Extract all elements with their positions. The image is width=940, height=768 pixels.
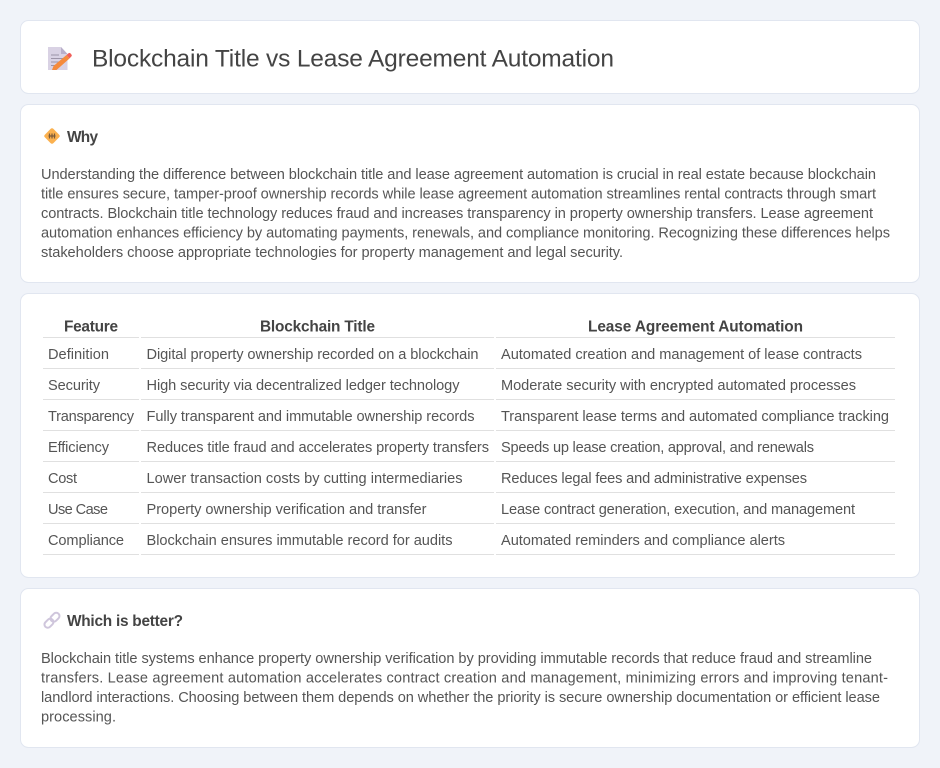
row: security: Security xyxy=(48,378,101,394)
icon: document with pencil xyxy=(48,47,72,70)
panel: which is better xyxy=(20,588,920,748)
row: transparency xyxy=(48,409,889,425)
text block: which is better paragraph: Blockchain title systems enhance property ownership verification by providing immutable records that reduce fraud and streamline xyxy=(41,651,872,667)
panel: header xyxy=(20,20,920,94)
panel: why xyxy=(20,104,920,282)
row: compliance: Compliance xyxy=(48,533,124,549)
row: compliance: Blockchain ensures immutable record for audits xyxy=(146,533,452,549)
row: security: High security via decentralized ledger technology xyxy=(146,378,460,394)
row: use case: Property ownership verification and transfer xyxy=(146,502,427,518)
row: use case xyxy=(48,502,855,518)
row: security: Moderate security with encrypted automated processes xyxy=(501,378,856,394)
row: definition: Digital property ownership recorded on a blockchain xyxy=(146,347,478,363)
text block: why paragraph: stakeholders choose appropriate technologies for property management and legal security. xyxy=(41,245,623,261)
row: cost: Cost xyxy=(48,471,77,487)
row: cost: Lower transaction costs by cutting intermediaries xyxy=(146,471,462,487)
panel: comparison table xyxy=(20,294,920,578)
row: efficiency: Speeds up lease creation, approval, and renewals xyxy=(501,440,814,456)
row: definition xyxy=(48,347,862,363)
row: cost xyxy=(48,471,807,487)
table header: Lease Agreement Automation xyxy=(588,318,803,336)
text block: why paragraph: Understanding the difference between blockchain title and lease agreement automation is crucial in real estate because blockchain xyxy=(41,167,876,183)
table header: Feature xyxy=(64,318,118,336)
row: efficiency: Efficiency xyxy=(48,440,110,456)
row: definition: Automated creation and management of lease contracts xyxy=(501,347,862,363)
heading: which is better: Which is better? xyxy=(67,613,183,630)
row: security xyxy=(48,378,856,394)
row: cost: Reduces legal fees and administrative expenses xyxy=(501,471,807,487)
text block: which is better paragraph: transfers. Lease agreement automation accelerates contract creation and management, minimizing errors and improving tenant- xyxy=(41,670,888,686)
text block: why paragraph: title ensures secure, tamper-proof ownership records while lease agreement automation streamlines rental contracts through smart xyxy=(41,186,876,202)
row: efficiency: Reduces title fraud and accelerates property transfers xyxy=(146,440,489,456)
title: Blockchain Title vs Lease Agreement Automation xyxy=(92,46,614,72)
table header: Blockchain Title xyxy=(260,318,375,336)
text block: why paragraph xyxy=(41,167,890,261)
text block: which is better paragraph xyxy=(41,651,888,726)
icon: diamond sign xyxy=(44,128,60,144)
row: transparency: Transparent lease terms and automated compliance tracking xyxy=(501,409,889,425)
row: use case: Use Case xyxy=(48,502,108,518)
row: compliance xyxy=(48,533,785,549)
text block: which is better paragraph: processing. xyxy=(41,710,116,726)
text block: why paragraph: automation enhances efficiency by automating payments, renewals, and compliance monitoring. Recognizing these differences helps xyxy=(41,226,890,242)
row: definition: Definition xyxy=(48,347,109,363)
row: transparency: Transparency xyxy=(48,409,135,425)
row: compliance: Automated reminders and compliance alerts xyxy=(501,533,785,549)
icon: chain link xyxy=(43,611,61,629)
text block: which is better paragraph: landlord interactions. Choosing between them depends on whether the priority is secure ownership documentation or efficient lease xyxy=(41,690,880,706)
row: use case: Lease contract generation, execution, and management xyxy=(501,502,855,518)
row: efficiency xyxy=(48,440,814,456)
heading: why: Why xyxy=(67,129,98,146)
table header xyxy=(64,318,803,336)
text block: why paragraph: contracts. Blockchain title technology reduces fraud and increases transparency in property ownership transfers. Lease agreement xyxy=(41,206,873,222)
row: transparency: Fully transparent and immutable ownership records xyxy=(146,409,474,425)
